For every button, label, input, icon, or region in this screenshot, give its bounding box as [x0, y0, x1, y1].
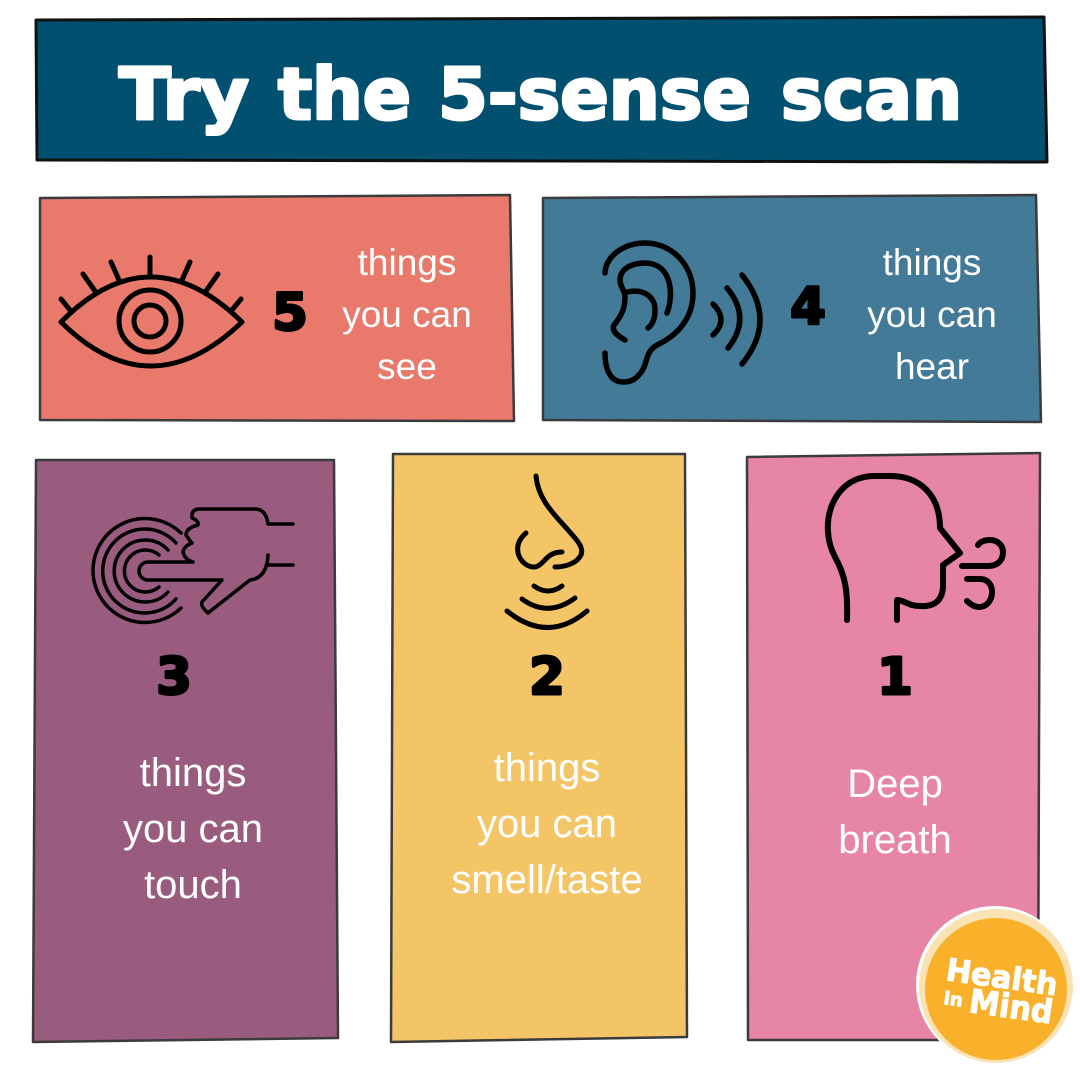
text: deep breath: Deep	[847, 762, 943, 806]
number 2: 2	[529, 648, 565, 707]
panel: smell and taste	[391, 454, 687, 1042]
text: things you can smell/taste: you can	[477, 802, 617, 846]
title: the	[278, 53, 411, 136]
text: things you can see: see	[377, 346, 437, 387]
panel: see	[40, 195, 514, 421]
icon: finger touching rings	[93, 509, 293, 622]
panel: hear	[543, 195, 1041, 422]
text: things you can smell/taste: things	[494, 746, 600, 790]
text: things you can touch: you can	[123, 807, 263, 851]
text: things you can hear: things	[883, 242, 981, 283]
number 3: 3	[156, 648, 192, 707]
text: things you can touch: things	[140, 751, 246, 795]
title banner	[36, 17, 1047, 162]
logo: Health in Mind: in	[942, 988, 964, 1012]
text: things you can touch: touch	[144, 863, 242, 907]
logo: Health in Mind	[916, 906, 1074, 1064]
panel: touch	[33, 460, 338, 1042]
title: scan	[781, 53, 962, 136]
title: 5-sense	[438, 53, 751, 136]
icon: eye	[61, 257, 242, 366]
text: things you can see: you can	[342, 294, 472, 335]
icon: ear with sound waves	[605, 243, 760, 382]
panel: deep breath	[747, 453, 1040, 1040]
title: Try	[119, 53, 249, 136]
text: things you can smell/taste: smell/taste	[451, 858, 643, 902]
text: deep breath: breath	[838, 818, 952, 862]
text: things you can see: things	[358, 242, 456, 283]
number 5: 5	[272, 284, 308, 343]
icon: head breathing out	[828, 476, 1003, 620]
number 1: 1	[877, 648, 913, 707]
number 4: 4	[790, 278, 826, 337]
logo: Health in Mind: Health	[944, 952, 1060, 1004]
logo: Health in Mind: Mind	[967, 981, 1055, 1032]
icon: nose	[507, 476, 587, 628]
text: things you can hear: hear	[895, 346, 969, 387]
text: things you can hear: you can	[867, 294, 997, 335]
